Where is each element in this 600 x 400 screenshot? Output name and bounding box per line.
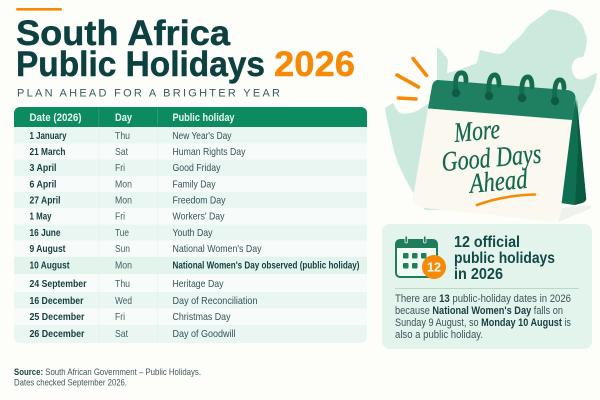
table header row: Public holiday (172, 112, 235, 124)
row: 1 January: Thu (115, 131, 130, 142)
row: 16 December: Day of Reconciliation (172, 296, 258, 307)
panel body text: Sunday 9 August, so Monday 10 August is (395, 317, 571, 329)
table header row: Date (2026) (30, 112, 82, 124)
panel divider (395, 288, 579, 289)
calendar shadow (558, 205, 592, 222)
row: 27 April: Freedom Day (172, 196, 226, 206)
calendar header band (428, 80, 576, 120)
panel body text: There are 13 public-holiday dates in 2026 (395, 293, 571, 305)
calendar handwriting (438, 111, 545, 202)
title: 2026 (274, 45, 355, 84)
row: 3 April (30, 163, 221, 174)
panel heading: 12 official (454, 234, 520, 251)
panel heading (454, 234, 555, 283)
source note: Source: South African Government – Public Holidays. (14, 367, 201, 377)
panel body text (395, 293, 571, 341)
row: 27 April: Mon (115, 196, 132, 206)
row: 25 December (30, 312, 231, 323)
panel background (382, 224, 592, 349)
calendar rings (455, 73, 564, 101)
row: 25 December: 25 December (30, 312, 84, 323)
row: 1 May: Workers' Day (172, 212, 225, 223)
row: 24 September: 24 September (30, 279, 86, 290)
row: 1 January: New Year's Day (172, 131, 232, 142)
row: 16 December: 16 December (30, 296, 84, 307)
panel body text: also a public holiday. (395, 329, 483, 341)
calendar back stand (561, 98, 586, 205)
map of South Africa (385, 9, 597, 210)
row: 24 September: Heritage Day (172, 279, 224, 290)
row: 21 March (30, 147, 246, 158)
title: Public Holidays (16, 45, 265, 84)
panel heading: in 2026 (454, 266, 503, 283)
title: South Africa (16, 14, 231, 53)
row: 1 May: Fri (115, 212, 125, 223)
row: 16 June: 16 June (30, 228, 61, 239)
row: 6 April: 6 April (30, 179, 57, 190)
calendar handwriting: Good Days (440, 139, 543, 178)
source note: Dates checked September 2026. (14, 378, 127, 388)
row: 9 August: National Women's Day (172, 244, 262, 255)
row: 25 December: Fri (115, 312, 125, 323)
row: 26 December (30, 329, 236, 340)
info panel (382, 224, 592, 349)
row: 9 August (30, 244, 262, 255)
panel heading: public holidays (454, 250, 555, 267)
calendar page (413, 108, 572, 222)
holiday table (14, 107, 367, 343)
row: 6 April (30, 179, 216, 190)
subtitle: PLAN AHEAD FOR A BRIGHTER YEAR (17, 88, 280, 100)
table header row (14, 107, 367, 127)
row: 25 December: Christmas Day (172, 312, 231, 323)
row: 27 April: 27 April (30, 196, 61, 206)
row: 24 September: Thu (115, 279, 130, 290)
row: 16 June (30, 228, 213, 239)
row: 27 April (30, 196, 226, 206)
calendar handwriting: More (452, 114, 501, 149)
row: 1 January (30, 131, 232, 142)
row: 26 December: Sat (115, 329, 128, 340)
row: 24 September (30, 279, 224, 290)
table body stripes (14, 127, 367, 343)
row: 26 December: Day of Goodwill (172, 329, 236, 340)
row: 1 May (30, 212, 225, 223)
row: 26 December: 26 December (30, 329, 84, 340)
row: 9 August: 9 August (30, 244, 66, 255)
row: 10 August: National Women's Day observed (public holiday) (172, 260, 360, 272)
calendar illustration (413, 73, 592, 222)
icon: orange burst lines (397, 58, 426, 99)
row: 1 May: 1 May (30, 212, 52, 223)
row: 3 April: Good Friday (172, 163, 221, 174)
row: 10 August: Mon (115, 260, 132, 272)
table header row: Day (115, 112, 132, 124)
ring knobs (452, 89, 559, 105)
row: 16 June: Youth Day (172, 228, 213, 239)
row: 16 December: Wed (115, 296, 132, 307)
orange underline (477, 194, 535, 205)
calendar handwriting: Ahead (467, 164, 530, 200)
row: 6 April: Family Day (172, 179, 216, 190)
panel body text: because National Women's Day falls on (395, 305, 563, 317)
row: 16 June: Tue (115, 228, 129, 239)
orange accent bar (16, 8, 62, 11)
row: 9 August: Sun (115, 244, 130, 255)
row: 21 March: 21 March (30, 147, 66, 158)
source note (14, 367, 201, 388)
icon: calendar with 12 badge (396, 236, 446, 279)
row: 10 August (30, 260, 360, 272)
row: 10 August: 10 August (30, 260, 70, 272)
row: 1 January: 1 January (30, 131, 67, 142)
row: 21 March: Sat (115, 147, 128, 158)
row: 3 April: Fri (115, 163, 125, 174)
icon: calendar with 12 badge: 12 (427, 260, 441, 274)
title (16, 14, 355, 84)
row: 16 December (30, 296, 258, 307)
row: 3 April: 3 April (30, 163, 57, 174)
row: 21 March: Human Rights Day (172, 147, 246, 158)
row: 6 April: Mon (115, 179, 132, 190)
